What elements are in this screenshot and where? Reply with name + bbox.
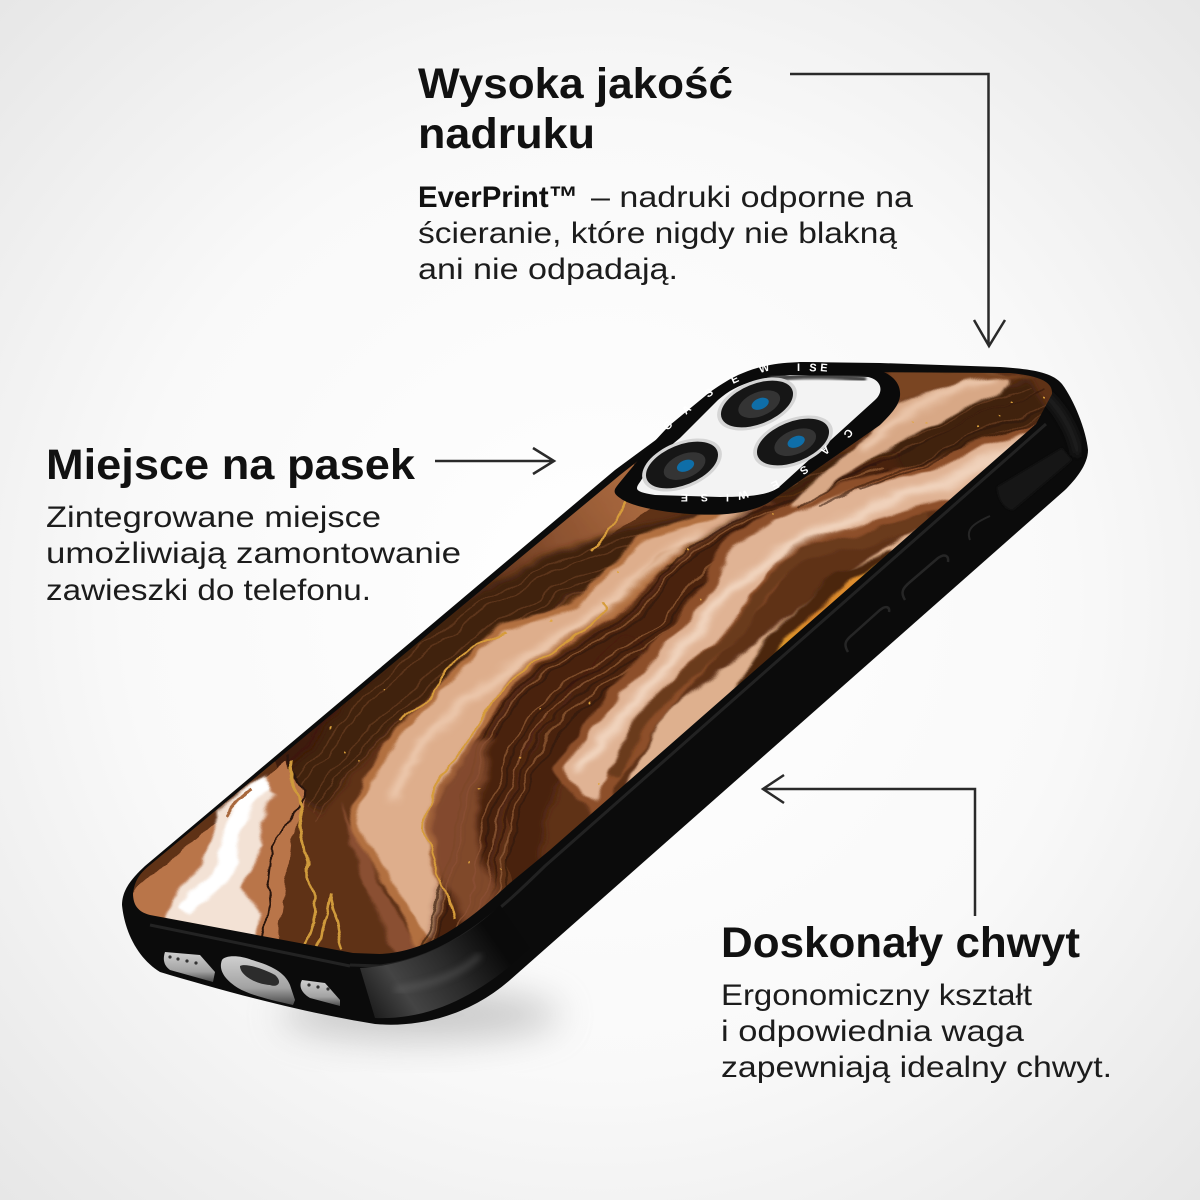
callout: print quality <box>418 60 913 286</box>
speaker grille right <box>301 980 340 1006</box>
case side highlights <box>150 395 1078 1018</box>
gold specks <box>329 394 1044 871</box>
text block: grip: i odpowiednia waga <box>721 1015 1024 1048</box>
text block: grip <box>721 979 1112 1084</box>
lower left marble orange <box>125 762 304 950</box>
phone shadow <box>280 989 560 1041</box>
heading: print quality: nadruku <box>418 110 595 158</box>
text block: print quality <box>418 181 913 286</box>
marble strata upper right <box>800 385 1045 505</box>
gold veins <box>400 498 625 917</box>
camera ring logo bottom: CASEWISE <box>681 426 855 503</box>
marble upper right band <box>790 374 1013 508</box>
marble layers <box>133 372 1052 954</box>
marble base <box>133 372 1052 954</box>
marble main band highlight <box>392 535 700 800</box>
lens left <box>634 428 730 502</box>
marble strata centre <box>420 463 889 946</box>
marble outer edge band <box>280 470 640 770</box>
text block: print quality: – nadruki odporne na <box>591 181 913 214</box>
arrow: strap mount <box>435 448 554 474</box>
marble lower right band <box>625 528 917 784</box>
text block: strap mount: Zintegrowane miejsce <box>46 501 381 534</box>
lens top <box>709 367 805 441</box>
gold edge dark backing <box>732 548 892 690</box>
marble strata centre light <box>431 467 884 941</box>
lens right <box>745 405 841 479</box>
text block: strap mount: umożliwiają zamontowanie <box>46 537 461 570</box>
text block: print quality: ani nie odpadają. <box>418 253 678 286</box>
text block: strap mount: zawieszki do telefonu. <box>46 574 371 607</box>
marble dark band lower <box>521 650 640 890</box>
text block: strap mount <box>46 501 461 607</box>
heading: print quality: Wysoka jakość <box>418 60 733 108</box>
marble mid brown right of main band <box>430 740 495 930</box>
volume up button <box>903 555 948 600</box>
marble upper right highlight <box>860 378 995 450</box>
marble dark band upper <box>300 395 1040 800</box>
camera inner shadow <box>770 376 866 380</box>
marble back panel <box>133 372 1052 954</box>
volume down button <box>845 607 889 652</box>
text block: print quality: ścieranie, które nigdy nie blakną <box>418 217 897 250</box>
marble lower right dark streak <box>616 520 930 775</box>
text block: grip: Ergonomiczny kształt <box>721 979 1033 1012</box>
arrow: grip <box>763 775 975 916</box>
marble main band halo <box>352 500 790 955</box>
marble middle band highlight <box>576 440 1030 770</box>
side button small <box>969 516 990 540</box>
phone case illustration <box>100 340 1100 1025</box>
lower left marble gold vein <box>292 762 345 948</box>
camera island <box>615 361 900 515</box>
heading: grip: Doskonały chwyt <box>721 919 1080 967</box>
charging port <box>221 956 295 1005</box>
camera glass <box>637 375 880 497</box>
gold edge patch <box>774 562 879 654</box>
lower left marble brown seam <box>225 790 255 815</box>
case body <box>122 362 1088 1025</box>
heading: strap mount: Miejsce na pasek <box>46 441 415 489</box>
lower left marble white band <box>185 782 270 912</box>
heading: print quality <box>418 60 733 158</box>
lower left marble dark seam <box>262 757 305 945</box>
camera ring <box>615 362 900 515</box>
marble middle band <box>562 432 1026 802</box>
camera ring logo top: CASEWISE <box>661 361 828 433</box>
callout: strap mount <box>46 441 461 607</box>
text block: grip: zapewniają idealny chwyt. <box>721 1051 1112 1084</box>
marble top corner brown <box>890 372 1040 402</box>
lower left marble cream band <box>160 775 276 940</box>
speaker grille left <box>164 952 215 982</box>
marble middle band halo <box>550 410 1055 830</box>
marble dark band strata upper <box>290 383 1054 820</box>
marble dark band centre <box>440 475 900 960</box>
text block: print quality: EverPrint™ <box>418 181 578 214</box>
side switch <box>997 448 1072 510</box>
arrow: print quality <box>790 74 1005 346</box>
callout: grip <box>721 919 1112 1084</box>
marble mid brown left of main band <box>345 800 420 960</box>
marble main band <box>359 510 770 944</box>
